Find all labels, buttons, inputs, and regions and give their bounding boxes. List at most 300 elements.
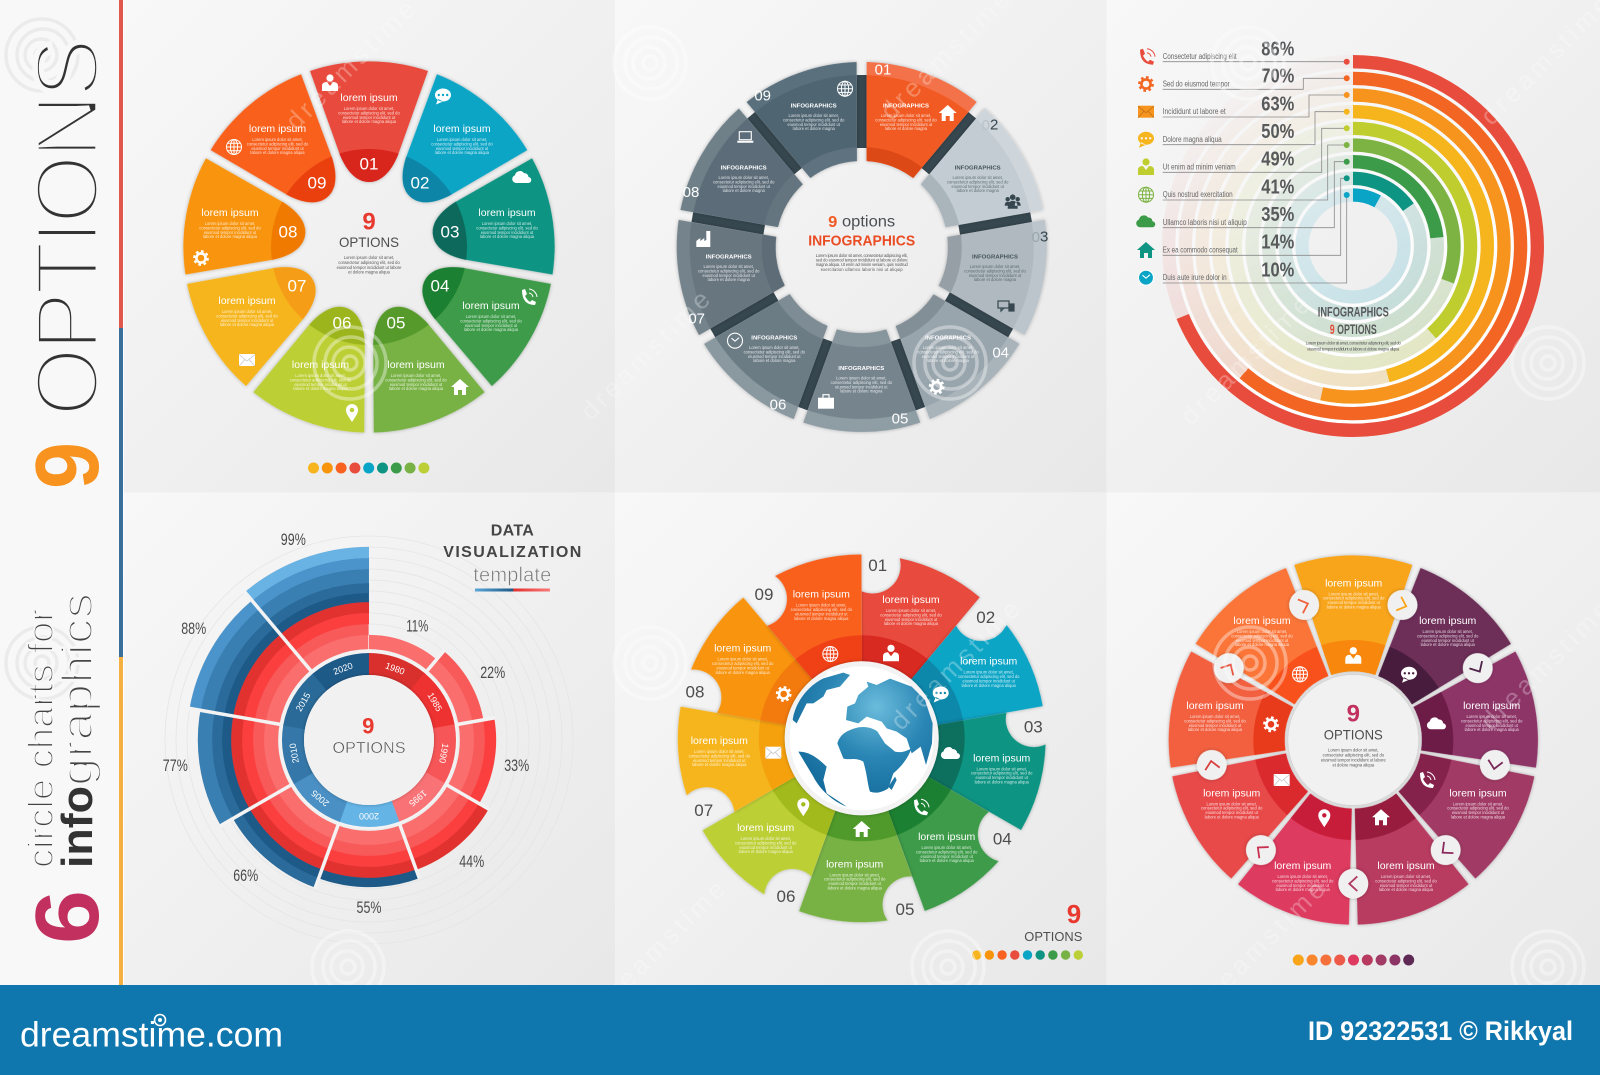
segment 04: eiusmod tempor incididunt ut: [465, 322, 518, 327]
segment 02: consectetur adipiscing elit, sed do: [431, 141, 493, 146]
segment 40 degrees: [1377, 567, 1512, 706]
segment 05: 05: [387, 314, 405, 332]
segment 06: eiusmod tempor incididunt ut: [740, 844, 793, 849]
panel: chart 3 radial bars: [1107, 0, 1600, 493]
segment 05: Lorem ipsum dolor sit amet,: [836, 375, 887, 380]
ring bars: [1169, 62, 1537, 430]
segment 40 degrees: eiusmod tempor incididunt ut: [1422, 637, 1475, 642]
segment 03: eiusmod tempor incididunt ut: [976, 775, 1029, 780]
row 9: [1138, 259, 1294, 285]
segment 320 degrees: Lorem ipsum dolor sit amet,: [1237, 628, 1287, 634]
segment 120 degrees: Lorem ipsum dolor sit amet,: [1453, 801, 1503, 806]
icon: factory: [696, 231, 710, 247]
segment 07: Lorem ipsum dolor sit amet,: [703, 264, 754, 268]
row 7: [1136, 204, 1294, 227]
segment 08: consectetur adipiscing elit, sed do: [199, 225, 261, 230]
segment 280 degrees: eiusmod tempor incididunt ut: [1189, 722, 1242, 727]
segment 320 degrees: lorem ipsum: [1233, 615, 1291, 627]
segment 160 degrees: Lorem ipsum dolor sit amet,: [1381, 874, 1431, 878]
segment 08: labore et dolore magna aliqua: [203, 234, 258, 239]
segment 03: 03: [1024, 718, 1043, 736]
segment 09: INFOGRAPHICS: [791, 104, 837, 110]
panel: chart 5 globe: [615, 493, 1107, 985]
segment 03: [430, 158, 556, 276]
segment 07: lorem ipsum: [691, 735, 748, 747]
percent labels: 11%: [406, 616, 428, 636]
centre label: et dolore magna aliqua: [1332, 762, 1375, 767]
segment 02: Lorem ipsum dolor sit amet,: [437, 136, 487, 142]
percent labels: 44%: [459, 852, 484, 871]
subheading: circle charts for: circle charts for: [20, 609, 61, 868]
segment top: lorem ipsum: [1325, 577, 1383, 589]
segment 01: consectetur adipiscing elit, sed do: [880, 612, 942, 617]
percent labels: 99%: [281, 530, 306, 549]
row 8: [1137, 232, 1294, 258]
row 1: Consectetur adipiscing elit: [1163, 52, 1237, 61]
segment 07: consectetur adipiscing elit, sed do: [216, 313, 278, 318]
segment 09: [755, 552, 864, 680]
segment 03: Lorem ipsum dolor sit amet,: [482, 220, 532, 226]
segment 07: consectetur adipiscing elit, sed do: [689, 753, 751, 758]
segment 280 degrees: consectetur adipiscing elit, sed do: [1184, 718, 1246, 723]
segment 04: 04: [992, 344, 1009, 362]
segment 40 degrees: consectetur adipiscing elit, sed do: [1417, 633, 1479, 638]
segment 280 degrees: [1161, 650, 1300, 787]
segment 07: labore et dolore magna: [708, 277, 750, 282]
icon: group: [1005, 194, 1021, 209]
segment 07: labore et dolore magna aliqua: [220, 322, 275, 327]
segment 03: 03: [441, 222, 459, 242]
icon: person: [322, 74, 338, 91]
segment 02: labore et dolore magna aliqua: [435, 150, 490, 155]
icon: home: [939, 105, 957, 121]
segment 240 degrees: labore et dolore magna aliqua: [1205, 814, 1260, 819]
row 9: 10%: [1261, 259, 1294, 281]
segment top: labore et dolore magna aliqua: [1327, 604, 1382, 609]
segment 240 degrees: eiusmod tempor incididunt ut: [1206, 810, 1259, 815]
segment dividers: [189, 591, 495, 888]
segment 240 degrees: lorem ipsum: [1203, 787, 1261, 799]
icon: pin: [346, 404, 358, 422]
row 1: [1140, 38, 1294, 65]
ring tracks: [1169, 62, 1537, 430]
centre label: 9: [362, 208, 376, 236]
segment 120 degrees: [1398, 752, 1536, 880]
segment 05: [798, 810, 914, 924]
segment 09: eiusmod tempor incididunt ut: [251, 145, 305, 150]
segment 08: 08: [683, 184, 699, 201]
row 3: Incididunt ut labore et: [1163, 107, 1226, 116]
connector bands: [691, 75, 1032, 410]
watermark overlays: dreamstime: [1174, 289, 1316, 431]
segment 09: Lorem ipsum dolor sit amet,: [796, 602, 847, 607]
segment 03: lorem ipsum: [478, 207, 536, 219]
left sidebar: [0, 0, 123, 985]
segment 09: consectetur adipiscing elit, sed do: [791, 607, 853, 612]
segment 01: [867, 62, 977, 178]
segment 240 degrees: Lorem ipsum dolor sit amet,: [1206, 801, 1257, 806]
segment 01: eiusmod tempor incididunt ut: [885, 616, 938, 621]
segment 06: Lorem ipsum dolor sit amet,: [295, 372, 346, 378]
centre label: OPTIONS: [1324, 726, 1383, 742]
centre label: 9 options: [828, 214, 895, 230]
row 6: 41%: [1261, 176, 1294, 198]
row 9: Duis aute irure dolor in: [1163, 273, 1227, 282]
watermark overlays: dreamstime: [884, 594, 1026, 736]
subheading: info: info: [53, 786, 102, 868]
percent labels: 66%: [233, 866, 258, 885]
icon: phone: [522, 289, 537, 305]
centre label: INFOGRAPHICS: [808, 232, 915, 250]
segment 03: eiusmod tempor incididunt ut: [969, 272, 1022, 277]
panel: chart 2 grey ring: [615, 0, 1107, 493]
segment 06: 06: [333, 314, 351, 332]
row 5: [1138, 148, 1294, 175]
heading: 6: 6: [18, 890, 118, 944]
icon: clock: [728, 333, 742, 348]
segment 04: 04: [431, 276, 449, 296]
row 6: [1138, 176, 1294, 202]
segment 200 degrees: consectetur adipiscing elit, sed do: [1272, 878, 1334, 883]
centre label: sed do eiusmod tempor incididunt ut labore et dolore: [816, 257, 908, 262]
segment 09: 09: [308, 174, 326, 192]
segment 06: 06: [770, 396, 786, 414]
row 2: 70%: [1261, 66, 1294, 88]
segment 06: Lorem ipsum dolor sit amet,: [740, 836, 791, 840]
row 2: [1139, 66, 1294, 91]
segment 05: consectetur adipiscing elit, sed do: [824, 876, 886, 881]
segment 01: consectetur adipiscing elit, sed do: [875, 117, 937, 122]
segment top: consectetur adipiscing elit, sed do: [1323, 595, 1385, 600]
segment 02: labore et dolore magna aliqua: [962, 682, 1017, 687]
year ring: 2020: [332, 660, 354, 677]
segment 80 degrees: lorem ipsum: [1463, 700, 1521, 712]
watermark overlays: dreamstime: [574, 284, 716, 426]
segment 07: Lorem ipsum dolor sit amet,: [222, 308, 272, 314]
centre label: 9 OPTIONS: [1330, 321, 1377, 337]
segment 09: labore et dolore magna aliqua: [250, 150, 305, 155]
year ring: 1985: [425, 691, 444, 713]
year ring: 1990: [437, 742, 451, 764]
segment 09: 09: [754, 88, 771, 104]
segment 01: 01: [868, 556, 887, 575]
centre hole: [304, 675, 434, 805]
segment 06: eiusmod tempor incididunt ut: [748, 353, 801, 358]
icon: cloud: [1427, 717, 1446, 729]
percent labels: [163, 530, 529, 917]
faint grid: [165, 536, 573, 944]
segment 120 degrees: lorem ipsum: [1449, 787, 1507, 799]
segment 02: Lorem ipsum dolor sit amet,: [952, 174, 1003, 180]
centre label: 9: [362, 714, 374, 738]
watermark overlays: dreamstime: [1189, 874, 1331, 1016]
segment 05: lorem ipsum: [387, 359, 445, 371]
segment 280 degrees: lorem ipsum: [1186, 700, 1244, 712]
icon: globe: [838, 81, 852, 96]
icon: phone: [914, 799, 929, 815]
centre label: Lorem ipsum dolor sit amet,: [344, 254, 394, 260]
segment 03: consectetur adipiscing elit, sed do: [476, 225, 538, 230]
segment 07: 07: [694, 801, 713, 820]
title: data visualization template: template: [473, 565, 551, 587]
footer logo: dreamstime.com: [20, 1016, 283, 1054]
segment 01: 01: [875, 62, 891, 78]
segment 280 degrees: labore et dolore magna aliqua: [1188, 727, 1243, 732]
segment 200 degrees: lorem ipsum: [1274, 860, 1332, 872]
icon: gear: [1264, 718, 1278, 731]
segment 09: lorem ipsum: [249, 123, 306, 135]
segment 08: eiusmod tempor incididunt ut: [718, 183, 771, 188]
year ring: 1995: [407, 788, 429, 808]
icon: mail: [239, 354, 255, 366]
segment 03: lorem ipsum: [973, 752, 1031, 764]
panel: chart 1 petals: [124, 0, 615, 493]
segment 01: labore et dolore magna aliqua: [342, 119, 397, 124]
segment 04: INFOGRAPHICS: [925, 336, 971, 342]
segment 03: [938, 218, 1049, 336]
segment 07: consectetur adipiscing elit, sed do: [698, 268, 760, 273]
segment 02: [910, 612, 1044, 725]
segment 03: eiusmod tempor incididunt ut: [481, 229, 534, 234]
segment 02: 02: [976, 608, 995, 627]
segment 08: labore et dolore magna: [723, 188, 765, 193]
leader dots: [1344, 59, 1350, 198]
icon: chat: [1401, 667, 1417, 683]
year ring: 2015: [294, 691, 313, 713]
row 8: Ex ea commodo consequat: [1163, 246, 1238, 254]
title: data visualization template: VISUALIZATION: [443, 544, 581, 561]
segment 02: Lorem ipsum dolor sit amet,: [963, 669, 1014, 674]
centre label: INFOGRAPHICS: [1318, 304, 1389, 320]
icon: cloud: [512, 171, 531, 183]
colour dots: [1293, 954, 1414, 966]
segment 01: labore et dolore magna: [885, 126, 928, 131]
segment 05: eiusmod tempor incididunt ut: [835, 384, 888, 389]
segment 06: [703, 293, 829, 420]
segment 05: eiusmod tempor incididunt ut: [390, 381, 443, 386]
colour dots: [308, 462, 429, 474]
segment 06: consectetur adipiscing elit, sed do: [735, 840, 797, 845]
sidebar colour line: [119, 0, 123, 985]
segment 06: [252, 304, 367, 434]
segment 07: [186, 265, 318, 387]
segment 04: consectetur adipiscing elit, sed do: [916, 849, 978, 854]
segment 05: consectetur adipiscing elit, sed do: [385, 377, 447, 382]
legend: 9 options: 9: [1067, 899, 1081, 929]
icon: phone: [1420, 772, 1435, 788]
segment 03: consectetur adipiscing elit, sed do: [971, 770, 1033, 775]
row 5: Ut enim ad minim veniam: [1163, 162, 1236, 172]
segment 02: consectetur adipiscing elit, sed do: [958, 674, 1020, 679]
row 4: [1138, 121, 1294, 148]
segment 04: labore et dolore magna: [927, 358, 970, 363]
year ring: 2005: [309, 788, 331, 808]
segment 09: 09: [755, 585, 773, 604]
segment 05: INFOGRAPHICS: [838, 366, 885, 372]
segment 09: labore et dolore magna: [793, 126, 835, 131]
centre label: et dolore magna aliqua: [348, 269, 391, 274]
segment 160 degrees: eiusmod tempor incididunt ut: [1380, 882, 1433, 887]
segment 08: lorem ipsum: [714, 643, 772, 655]
centre label: exercitation ullamco laboris nisi ut aliquip: [821, 266, 903, 271]
centre label: magna aliqua. Ut enim ad minim veniam, quis nostrud: [816, 262, 908, 267]
segment 05: 05: [892, 410, 908, 428]
icon: pin: [1318, 809, 1330, 827]
segment 04: [420, 265, 552, 387]
segment 01: Lorem ipsum dolor sit amet,: [344, 106, 394, 110]
segment 04: labore et dolore magna aliqua: [920, 858, 975, 863]
icon: globe: [1292, 667, 1308, 682]
segment 08: INFOGRAPHICS: [721, 166, 767, 172]
legend: 9 options: [972, 899, 1083, 960]
segment 08: eiusmod tempor incididunt ut: [204, 229, 257, 234]
segment 08: labore et dolore magna aliqua: [716, 669, 771, 674]
segment 08: consectetur adipiscing elit, sed do: [712, 661, 774, 666]
segment 02: eiusmod tempor incididunt ut: [952, 183, 1005, 188]
centre label: [332, 714, 406, 757]
segment 04: eiusmod tempor incididunt ut: [921, 853, 974, 858]
panel: chart 6 warm ring: [1107, 493, 1600, 985]
segment 02: consectetur adipiscing elit, sed do: [947, 179, 1009, 184]
segment 07: eiusmod tempor incididunt ut: [693, 757, 746, 762]
percent labels: 77%: [163, 756, 188, 775]
centre label: consectetur adipiscing elit, sed do: [1323, 752, 1385, 757]
percent labels: 22%: [480, 663, 505, 682]
segment 08: consectetur adipiscing elit, sed do: [713, 179, 775, 184]
segment 05: consectetur adipiscing elit, sed do: [831, 379, 893, 384]
segment 01: INFOGRAPHICS: [883, 104, 929, 110]
icon: mail: [1274, 774, 1290, 786]
segment 09: eiusmod tempor incididunt ut: [795, 611, 848, 616]
segment 02: eiusmod tempor incididunt ut: [963, 678, 1016, 683]
segment 09: lorem ipsum: [793, 589, 850, 601]
segment top: Lorem ipsum dolor sit amet,: [1328, 591, 1379, 596]
icon: chat bubbles: [998, 301, 1014, 311]
percent labels: 55%: [356, 898, 382, 917]
centre label: [337, 208, 402, 274]
segment 320 degrees: consectetur adipiscing elit, sed do: [1231, 633, 1293, 638]
segment 06: consectetur adipiscing elit, sed do: [290, 377, 352, 382]
centre label: consectetur adipiscing elit, sed do: [338, 259, 400, 264]
segment 01: lorem ipsum: [340, 92, 398, 104]
subheading: graphics: graphics: [53, 593, 102, 786]
segment 09: eiusmod tempor incididunt ut: [788, 121, 841, 126]
row 8: 14%: [1261, 232, 1294, 254]
segment 01: Lorem ipsum dolor sit amet,: [886, 608, 936, 612]
segment 07: [676, 705, 795, 816]
heading: 9: 9: [18, 442, 118, 489]
segment 200 degrees: [1237, 792, 1354, 926]
icon: gear: [930, 380, 944, 394]
segment 05: [802, 328, 922, 434]
icon: mail: [765, 747, 781, 759]
segment 08: Lorem ipsum dolor sit amet,: [718, 174, 769, 180]
icon: laptop: [737, 132, 753, 142]
segment 07: 07: [288, 276, 306, 296]
segment 06: Lorem ipsum dolor sit amet,: [749, 344, 800, 350]
icon: home: [1372, 809, 1390, 825]
segment 240 degrees: [1171, 752, 1309, 880]
segment 02: [400, 73, 528, 204]
segment 06: lorem ipsum: [292, 359, 349, 371]
row 7: 35%: [1261, 204, 1294, 226]
segment 02: lorem ipsum: [960, 656, 1018, 668]
segment 06: 06: [777, 887, 795, 906]
panel: chart 4 data visualization: [105, 476, 633, 1004]
value bands: [105, 476, 633, 1004]
segment 04: [888, 776, 1012, 912]
segment 07: lorem ipsum: [218, 295, 276, 307]
segment 40 degrees: lorem ipsum: [1419, 615, 1477, 627]
segment 08: 08: [279, 222, 297, 242]
segment 120 degrees: labore et dolore magna aliqua: [1451, 814, 1506, 819]
segment 80 degrees: labore et dolore magna aliqua: [1465, 727, 1520, 732]
segment 03: labore et dolore magna aliqua: [480, 234, 535, 239]
row 5: 49%: [1261, 148, 1294, 170]
icon: briefcase: [818, 395, 834, 409]
segment 07: Lorem ipsum dolor sit amet,: [694, 748, 745, 754]
segment 120 degrees: consectetur adipiscing elit, sed do: [1447, 805, 1509, 810]
segment 08: 08: [686, 682, 704, 702]
segment 160 degrees: lorem ipsum: [1377, 860, 1435, 872]
segment 04: lorem ipsum: [462, 300, 520, 312]
segment 200 degrees: labore et dolore magna aliqua: [1276, 887, 1331, 892]
segment 03: INFOGRAPHICS: [972, 255, 1018, 261]
segment 02: labore et dolore magna: [957, 188, 999, 193]
segment 05: lorem ipsum: [826, 858, 884, 870]
segment top: [1294, 555, 1412, 675]
segment 09: labore et dolore magna aliqua: [794, 615, 849, 620]
segment 05: labore et dolore magna aliqua: [389, 386, 444, 391]
icon: pin: [797, 798, 809, 816]
segment 02: 02: [411, 174, 429, 192]
segment 02: 02: [982, 116, 998, 134]
segment 40 degrees: labore et dolore magna aliqua: [1421, 642, 1476, 647]
icon: cloud: [941, 747, 960, 759]
segment 200 degrees: Lorem ipsum dolor sit amet,: [1277, 874, 1328, 878]
legend: 9 options: OPTIONS: [1024, 929, 1083, 944]
segment 06: labore et dolore magna aliqua: [293, 386, 348, 391]
segment 08: [679, 108, 804, 228]
footer bar: [0, 985, 1600, 1075]
segment 04: consectetur adipiscing elit, sed do: [460, 318, 522, 323]
segment 07: 07: [688, 310, 705, 328]
row 2: Sed do eiusmod tempor: [1163, 80, 1230, 88]
segment 07: eiusmod tempor incididunt ut: [221, 317, 274, 322]
segment 03: labore et dolore magna: [974, 277, 1017, 282]
segment 05: Lorem ipsum dolor sit amet,: [391, 372, 441, 378]
segment 07: eiusmod tempor incididunt ut: [703, 272, 756, 277]
segment 03: Lorem ipsum dolor sit amet,: [970, 264, 1020, 268]
segment 240 degrees: consectetur adipiscing elit, sed do: [1201, 805, 1263, 810]
segment 04: Lorem ipsum dolor sit amet,: [921, 844, 972, 850]
segment 01: [862, 556, 980, 679]
segment 06: [702, 776, 836, 902]
segment 02: INFOGRAPHICS: [955, 166, 1001, 172]
segment 06: labore et dolore magna: [753, 358, 796, 363]
centre label: [808, 214, 915, 271]
segment 05: Lorem ipsum dolor sit amet,: [829, 872, 880, 877]
segment 08: eiusmod tempor incididunt ut: [717, 665, 770, 670]
segment 06: lorem ipsum: [737, 822, 795, 834]
segment 04: [894, 293, 1020, 420]
segment 80 degrees: [1412, 650, 1540, 770]
segment 01: [310, 61, 428, 182]
segment 08: Lorem ipsum dolor sit amet,: [717, 656, 768, 661]
segment 08: [182, 158, 308, 276]
segment 08: Lorem ipsum dolor sit amet,: [205, 220, 255, 226]
centre label: Lorem ipsum dolor sit amet, consectetur adipiscing elit,: [816, 252, 908, 258]
